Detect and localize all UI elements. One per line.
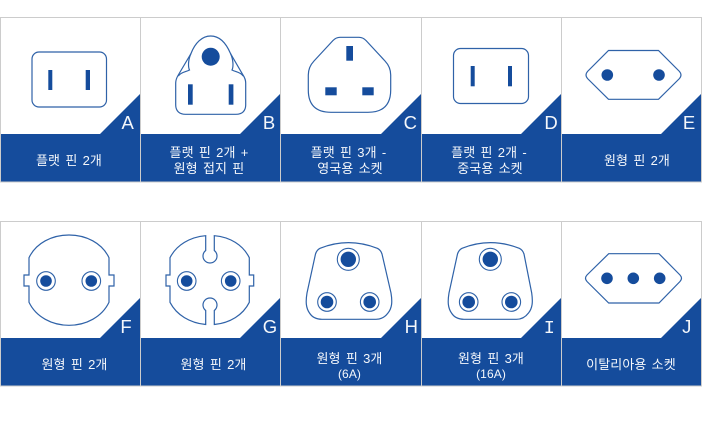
panel: A (0, 18, 140, 182)
label banner H (281, 298, 421, 386)
panel: B (140, 18, 280, 182)
letter D: D (544, 112, 558, 133)
caption I: 원형 핀 3개 (458, 351, 524, 366)
caption B: 플랫 핀 2개 + (170, 145, 248, 160)
icon: plug G (166, 236, 254, 324)
label banner A (1, 94, 140, 182)
caption E: 원형 핀 2개 (604, 153, 670, 168)
label banner C (281, 94, 421, 182)
label banner J (562, 298, 701, 386)
caption C: 플랫 핀 3개 - (311, 145, 386, 160)
letter A: A (122, 112, 135, 133)
label banner B (141, 94, 280, 182)
icon: plug A (32, 52, 106, 107)
icon: plug I (448, 243, 532, 319)
letter I: I (544, 318, 555, 339)
label banner F (1, 298, 140, 386)
label banner D (422, 94, 561, 182)
label banner I (422, 298, 561, 386)
caption F: 원형 핀 2개 (42, 357, 108, 372)
letter J: J (682, 316, 691, 337)
letter F: F (120, 316, 132, 337)
letter H: H (405, 316, 418, 337)
caption B: 원형 접지 핀 (174, 161, 244, 176)
letter E: E (683, 112, 695, 133)
caption I: (16A) (476, 367, 506, 381)
letter C: C (404, 112, 417, 133)
panel: I (422, 222, 562, 386)
letter G: G (263, 316, 277, 337)
caption H: 원형 핀 3개 (316, 351, 382, 366)
letter B: B (263, 112, 275, 133)
caption C: 영국용 소켓 (317, 161, 383, 176)
panel: E (562, 18, 702, 182)
label banner G (141, 298, 280, 386)
panel: H (280, 222, 422, 386)
icon: plug F (24, 235, 114, 325)
panel: F (0, 222, 140, 386)
icon: plug H (306, 243, 392, 319)
icon: plug B (176, 36, 246, 114)
icon: plug E (586, 50, 681, 99)
panel: D (422, 18, 562, 182)
caption H: (6A) (338, 367, 361, 381)
panel: C (280, 18, 422, 182)
caption D: 플랫 핀 2개 - (451, 145, 527, 160)
caption J: 이탈리아용 소켓 (586, 357, 676, 372)
caption D: 중국용 소켓 (457, 161, 523, 176)
caption G: 원형 핀 2개 (180, 357, 246, 372)
icon: plug D (454, 48, 528, 104)
icon: plug J (586, 254, 682, 303)
label banner E (562, 94, 701, 182)
icon: plug C (308, 37, 391, 112)
panel: J (562, 222, 702, 386)
caption A: 플랫 핀 2개 (36, 153, 102, 168)
panel: G (140, 222, 280, 386)
